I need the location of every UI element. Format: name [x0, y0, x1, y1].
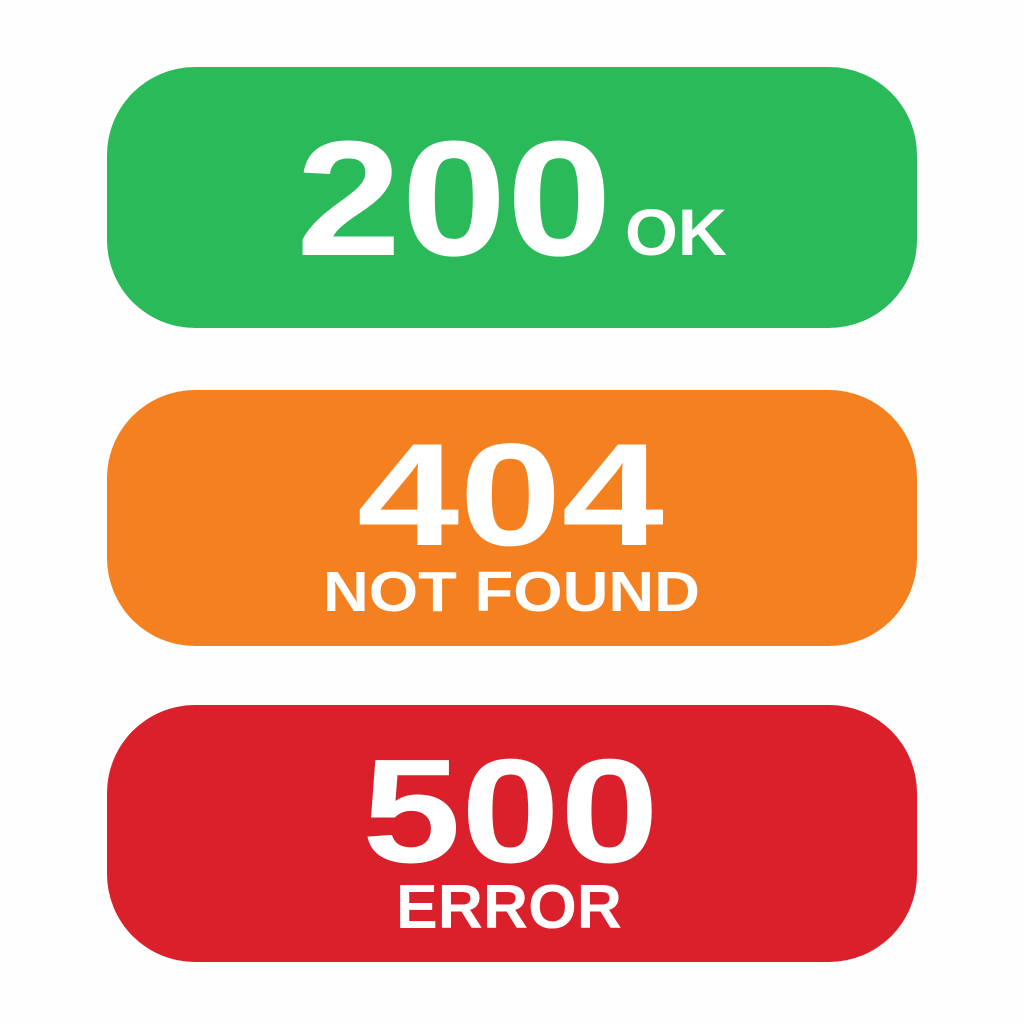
- heading: 404: 404: [357, 413, 664, 576]
- label: NOT FOUND: NOT FOUND: [323, 560, 700, 624]
- panel: 404 NOT FOUND: [107, 390, 917, 646]
- panel: 500 ERROR: [107, 705, 917, 962]
- label: ERROR: ERROR: [396, 873, 622, 942]
- heading: 200: 200: [296, 107, 612, 290]
- label: OK: OK: [625, 195, 727, 269]
- heading: 500: 500: [362, 729, 659, 894]
- panel: 200 OK: [107, 67, 917, 328]
